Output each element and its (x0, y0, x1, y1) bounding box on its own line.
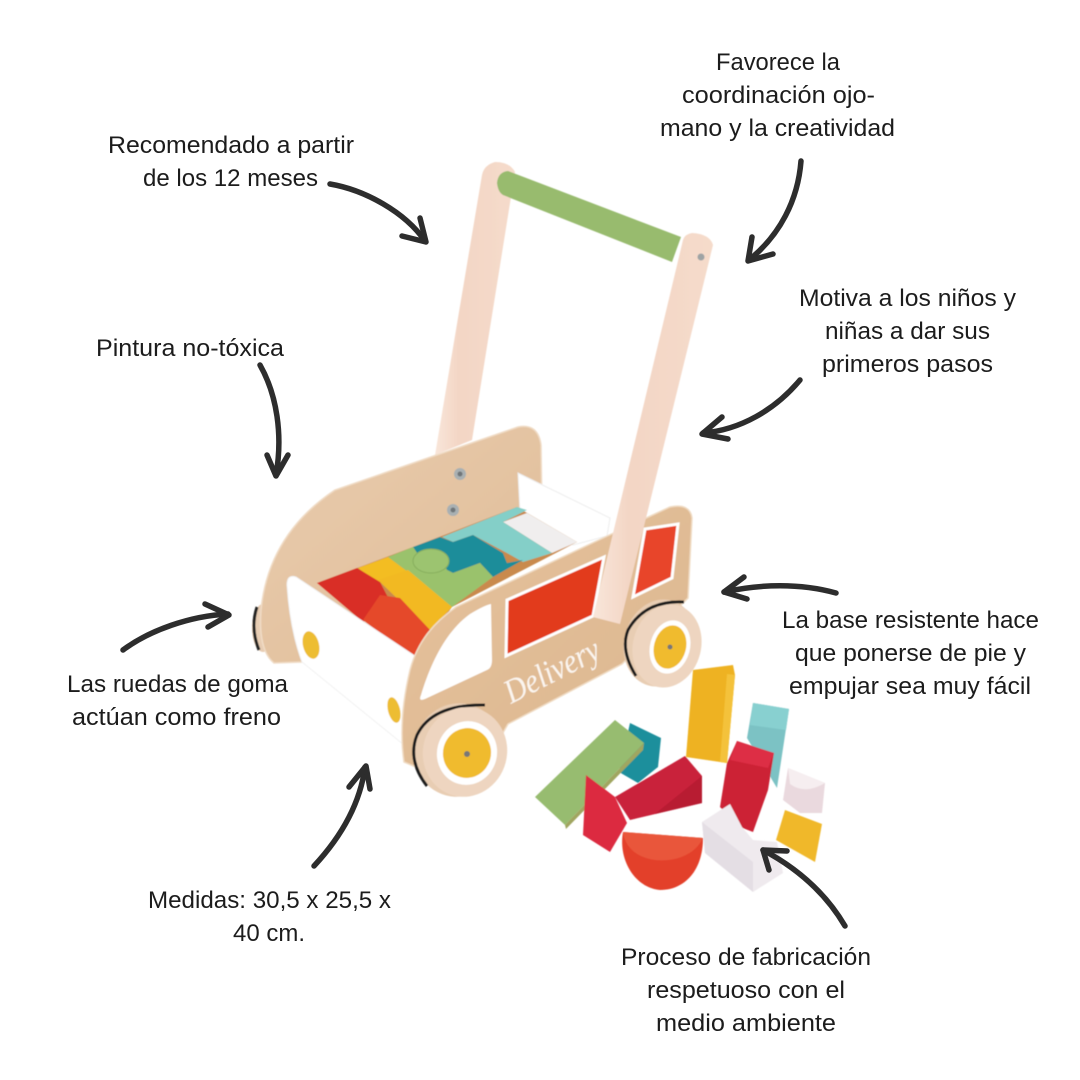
back panel (261, 426, 542, 663)
van red side window (506, 557, 604, 656)
caption: first steps: niñas a dar sus (825, 318, 990, 345)
building blocks in the cart (317, 507, 577, 660)
yellow cube (776, 810, 822, 862)
crimson block (720, 741, 774, 832)
arrow: first steps (702, 380, 800, 439)
caption: coordination (660, 49, 895, 142)
arrow: manufacturing (763, 850, 845, 926)
green blocks (388, 547, 493, 607)
caption: dimensions: Medidas: 30,5 x 25,5 x (148, 887, 391, 914)
teal block (619, 723, 661, 783)
white front board (287, 576, 421, 745)
caption: coordination: coordinación ojo- (682, 82, 875, 109)
van red rear window (633, 524, 678, 597)
green half disc (413, 549, 449, 573)
white blocks (503, 513, 577, 553)
red block (317, 568, 392, 622)
caption: base: La base resistente hace (782, 607, 1039, 634)
van front window (420, 604, 492, 700)
green handle bar (497, 171, 681, 262)
handle post bolt (698, 254, 704, 260)
red wedge (615, 756, 702, 820)
caption: dimensions: 40 cm. (233, 920, 305, 947)
caption: paint: Pintura no-tóxica (96, 335, 284, 362)
caption: first steps (799, 285, 1017, 378)
rear right wheel (614, 591, 711, 695)
left handle post (435, 162, 515, 455)
caption: manufacturing (621, 944, 871, 1037)
white arch block (702, 804, 783, 892)
arrow: coordination (748, 161, 801, 261)
yellow block (358, 557, 408, 583)
caption: rubber wheels: Las ruedas de goma (67, 671, 288, 698)
orange block (363, 595, 430, 660)
caption: first steps: primeros pasos (822, 351, 993, 378)
light teal blocks (442, 507, 552, 562)
caption: age: de los 12 meses (143, 165, 318, 192)
arrow: age (330, 184, 426, 242)
caption: manufacturing: respetuoso con el (647, 977, 845, 1004)
caption: rubber wheels: actúan como freno (72, 704, 281, 731)
caption: manufacturing: medio ambiente (656, 1010, 836, 1037)
yellow tall block (686, 665, 735, 763)
caption: base (782, 607, 1039, 700)
white rear board (518, 473, 610, 545)
caption: base: que ponerse de pie y (795, 640, 1027, 667)
caption: manufacturing: Proceso de fabricación (621, 944, 871, 971)
caption: dimensions (148, 887, 391, 947)
front wheel (403, 693, 517, 807)
wooden walker toy (252, 162, 713, 807)
caption: coordination: mano y la creatividad (660, 115, 895, 142)
caption: age (108, 132, 354, 192)
green plank (535, 720, 644, 829)
arrow: dimensions (314, 766, 370, 866)
right handle post (593, 233, 713, 624)
arrow: base (724, 577, 836, 599)
caption: rubber wheels (67, 671, 288, 731)
arrow: paint (260, 365, 288, 476)
van side panel (402, 506, 692, 790)
caption: coordination: Favorece la (716, 49, 840, 76)
pink half round block (783, 768, 825, 813)
dark teal blocks (413, 535, 523, 577)
caption: base: empujar sea muy fácil (789, 673, 1031, 700)
caption: age: Recomendado a partir (108, 132, 354, 159)
shadowed cart floor (317, 507, 577, 660)
Delivery lettering: Delivery (497, 631, 607, 712)
light teal block (747, 703, 789, 788)
red triangular block (583, 775, 627, 852)
rear left wheel (252, 604, 274, 652)
long yellow block (378, 570, 452, 630)
loose building blocks (535, 665, 825, 892)
caption: first steps: Motiva a los niños y (799, 285, 1017, 312)
arrow: rubber wheels (123, 604, 229, 650)
orange half circle block (622, 832, 703, 890)
panel bolts (447, 468, 466, 516)
